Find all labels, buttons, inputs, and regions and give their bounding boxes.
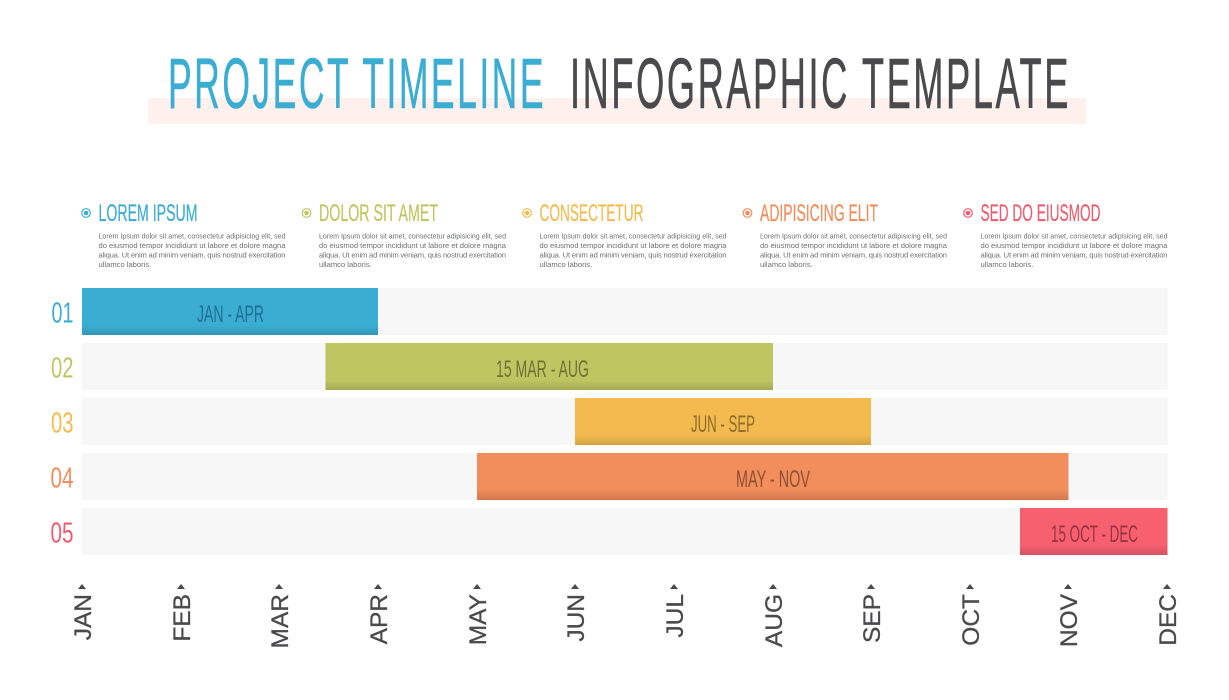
legend: adipisicing elit: ADIPISICING ELIT: [760, 200, 878, 227]
legend: lorem ipsum: aliqua. Ut enim ad minim veniam, quis nostrud exercitation: [98, 250, 286, 260]
row 01: Jan - Apr: JAN - APR: [197, 301, 264, 328]
legend: consectetur: Lorem Ipsum dolor sit amet, consectetur adipisicing elit, sed: [540, 232, 726, 240]
month axis: JAN: [70, 594, 97, 640]
row 01: Jan - Apr: [52, 288, 1168, 335]
month axis: OCT: [958, 594, 985, 646]
row 05: 15 Oct - Dec: 05: [50, 518, 74, 550]
month axis: [70, 584, 1182, 648]
row 04: May - Nov: [50, 453, 1168, 500]
row 05: 15 Oct - Dec: 15 OCT - DEC: [1051, 521, 1138, 548]
legend: dolor sit amet: do eiusmod tempor incididunt ut labore et dolore magna: [319, 241, 507, 250]
legend: consectetur: CONSECTETUR: [540, 200, 644, 227]
legend: consectetur: do eiusmod tempor incididunt ut labore et dolore magna: [540, 241, 727, 250]
title: PROJECT TIMELINE: [168, 45, 546, 124]
legend: dolor sit amet: [302, 200, 507, 269]
row 02: 15 Mar - Aug: [51, 343, 1168, 390]
legend: dolor sit amet: aliqua. Ut enim ad minim veniam, quis nostrud exercitation: [319, 250, 506, 260]
row 03: Jun - Sep: 03: [51, 408, 74, 440]
row 04: May - Nov: 04: [50, 462, 74, 494]
legend: lorem ipsum: LOREM IPSUM: [98, 200, 198, 227]
month axis: DEC: [1155, 594, 1182, 646]
legend: adipisicing elit: [743, 200, 948, 269]
row 05: 15 Oct - Dec: [50, 508, 1168, 555]
legend: lorem ipsum: [82, 200, 286, 269]
legend: adipisicing elit: ullamco laboris.: [760, 260, 813, 269]
legend: dolor sit amet: DOLOR SIT AMET: [319, 200, 438, 227]
legend: sed do eiusmod: aliqua. Ut enim ad minim veniam, quis nostrud exercitation: [980, 250, 1168, 260]
month axis: JUL: [662, 594, 689, 638]
legend: consectetur: aliqua. Ut enim ad minim veniam, quis nostrud exercitation: [540, 250, 726, 260]
legend: sed do eiusmod: do eiusmod tempor incididunt ut labore et dolore magna: [980, 241, 1168, 250]
legend: sed do eiusmod: SED DO EIUSMOD: [980, 200, 1100, 227]
month axis: JUN: [563, 594, 590, 642]
legend: lorem ipsum: ullamco laboris.: [98, 260, 151, 269]
month axis: FEB: [169, 594, 196, 642]
month axis: MAR: [267, 594, 294, 648]
legend: consectetur: [523, 200, 727, 269]
month axis: SEP: [859, 594, 886, 643]
row 02: 15 Mar - Aug: 02: [51, 352, 74, 384]
legend: adipisicing elit: aliqua. Ut enim ad minim veniam, quis nostrud exercitation: [760, 250, 947, 260]
legend: sed do eiusmod: ullamco laboris.: [980, 260, 1033, 269]
month axis: APR: [366, 594, 393, 644]
month axis: MAY: [465, 594, 492, 645]
month axis: NOV: [1056, 593, 1083, 647]
legend: consectetur: ullamco laboris.: [540, 260, 592, 269]
legend: lorem ipsum: do eiusmod tempor incididunt ut labore et dolore magna: [98, 241, 286, 250]
legend: lorem ipsum: Lorem Ipsum dolor sit amet, consectetur adipisicing elit, sed: [98, 232, 286, 240]
legend: dolor sit amet: Lorem Ipsum dolor sit amet, consectetur adipisicing elit, sed: [319, 232, 506, 240]
row 03: Jun - Sep: JUN - SEP: [691, 411, 755, 438]
row 03: Jun - Sep: [51, 398, 1168, 445]
row 04: May - Nov: MAY - NOV: [736, 466, 810, 493]
legend: sed do eiusmod: [964, 200, 1168, 269]
legend: sed do eiusmod: Lorem Ipsum dolor sit amet, consectetur adipisicing elit, sed: [980, 232, 1168, 240]
legend: adipisicing elit: do eiusmod tempor incididunt ut labore et dolore magna: [760, 241, 948, 250]
month axis: AUG: [761, 594, 788, 647]
legend: dolor sit amet: ullamco laboris.: [319, 260, 372, 269]
row 02: 15 Mar - Aug: 15 MAR - AUG: [496, 356, 589, 383]
legend: adipisicing elit: Lorem Ipsum dolor sit amet, consectetur adipisicing elit, sed: [760, 232, 947, 240]
row 01: Jan - Apr: 01: [52, 298, 74, 330]
